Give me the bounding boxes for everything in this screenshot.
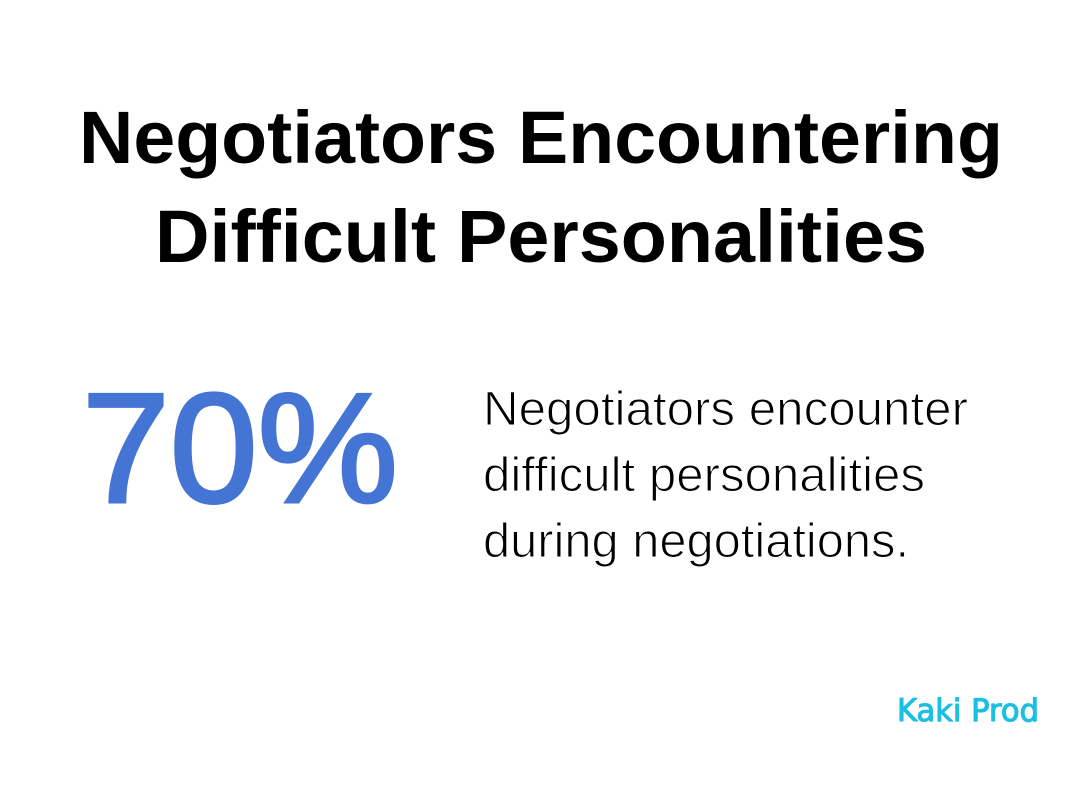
description text: difficult personalities bbox=[483, 449, 925, 502]
title bbox=[79, 96, 1003, 278]
statistic: 70%: 70% bbox=[82, 361, 398, 535]
description text: Negotiators encounter bbox=[483, 383, 968, 436]
description text bbox=[483, 383, 968, 568]
logo: Kaki Prod: Kaki Prod bbox=[897, 693, 1039, 729]
title: Difficult Personalities bbox=[155, 195, 927, 278]
description text: during negotiations. bbox=[483, 515, 909, 568]
title: Negotiators Encountering bbox=[79, 96, 1003, 179]
